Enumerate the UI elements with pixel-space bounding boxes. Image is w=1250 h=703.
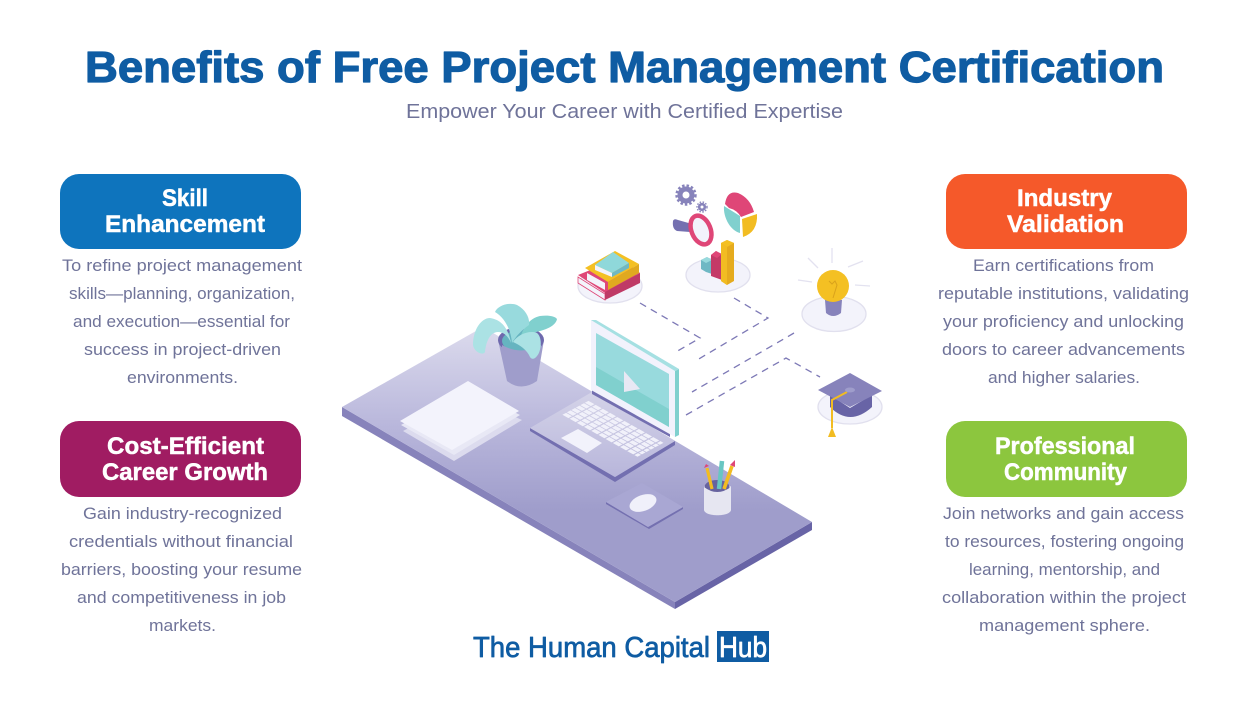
screen [591,320,679,437]
badge: industry validation: Validation [1007,211,1124,238]
text: skill enhancement description: environments. [127,368,238,387]
text: professional community description: collaboration within the project [942,588,1186,607]
text: skill enhancement description: skills—planning, organization, [69,284,295,303]
icon: books [578,251,642,303]
badge: professional community: Professional [995,433,1135,460]
text: professional community description: learning, mentorship, and [969,560,1160,579]
text: cost-efficient description: markets. [149,616,216,635]
title: Benefits of Free Project Management Certification [85,43,1164,92]
badge: cost-efficient career growth [60,421,301,497]
trackpad [561,429,602,453]
badge: skill enhancement: Skill [162,185,208,212]
panel: professional community [942,421,1187,635]
text: professional community description [942,504,1186,635]
panel: cost-efficient career growth [60,421,302,635]
icon: magnifier, gears, chart [673,186,757,292]
text: cost-efficient description: barriers, boosting your resume [61,560,302,579]
paper stack [400,381,522,461]
pencil cup [704,460,735,515]
panel: skill enhancement [60,174,302,387]
text: skill enhancement description: and execution—essential for [73,312,290,331]
illustration: isometric desk [342,186,882,609]
badge: professional community [946,421,1187,497]
logo: The Human Capital Hub: Hub [719,632,767,664]
badge: cost-efficient career growth: Cost-Efficient [107,433,264,460]
icon: graduation cap [818,373,882,437]
gears [680,189,692,201]
text: professional community description: to resources, fostering ongoing [945,532,1184,551]
text: industry validation description: and higher salaries. [988,368,1140,387]
laptop [530,320,679,482]
badge: skill enhancement [60,174,301,249]
badge: industry validation [946,174,1187,249]
connector lines [640,298,820,415]
plate [686,258,750,292]
panel: industry validation [938,174,1189,387]
logo: The Human Capital Hub: The Human Capital [473,632,710,664]
bar chart [701,257,712,274]
badge: industry validation: Industry [1017,185,1113,212]
badge: skill enhancement: Enhancement [105,211,265,238]
text: professional community description: management sphere. [979,616,1150,635]
text: skill enhancement description: To refine project management [62,256,302,275]
text: cost-efficient description: and competitiveness in job [77,588,286,607]
hinge [592,389,670,437]
text: industry validation description [938,256,1189,387]
text: cost-efficient description: Gain industry-recognized [83,504,282,523]
text: industry validation description: reputable institutions, validating [938,284,1189,303]
badge: professional community: Community [1004,459,1128,486]
play icon [624,371,640,392]
pie chart [725,192,754,217]
text: industry validation description: doors to career advancements [942,340,1185,359]
text: cost-efficient description [61,504,302,635]
text: industry validation description: your proficiency and unlocking [943,312,1184,331]
text: skill enhancement description [62,256,302,387]
magnifier [673,219,692,232]
subtitle: Empower Your Career with Certified Expertise [406,100,843,123]
icon: light bulb [798,248,870,332]
mouse pad and mouse [606,483,683,529]
laptop base [530,428,675,482]
desk [342,327,812,609]
keyboard [564,402,662,456]
text: skill enhancement description: success in project-driven [84,340,281,359]
text: cost-efficient description: credentials without financial [69,532,293,551]
plant [473,304,557,386]
text: industry validation description: Earn certifications from [973,256,1154,275]
badge: cost-efficient career growth: Career Growth [102,459,268,486]
text: professional community description: Join networks and gain access [943,504,1184,523]
